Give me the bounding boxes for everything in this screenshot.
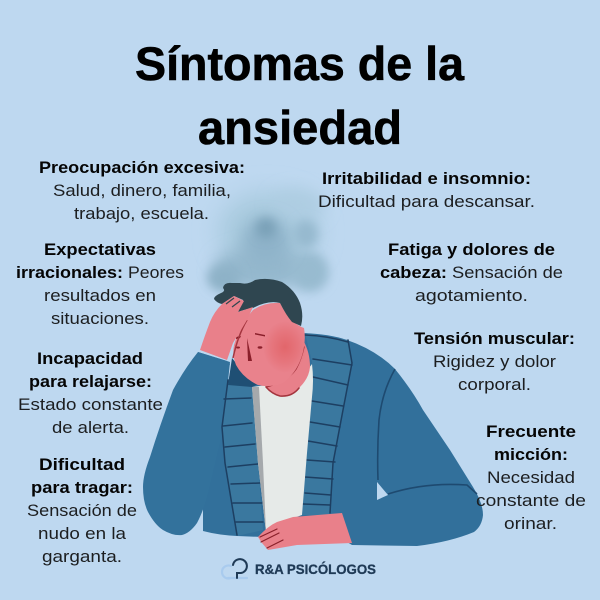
sleeve cuff over raised hand bbox=[198, 352, 230, 385]
symptom: dificultad para tragar: para tragar: bbox=[31, 478, 133, 497]
neck bbox=[265, 340, 310, 396]
symptom: incapacidad para relajarse bbox=[18, 349, 163, 437]
symptom: dificultad para tragar: Dificultad bbox=[39, 455, 125, 474]
symptom: tensión muscular: Tensión muscular: bbox=[414, 329, 575, 348]
symptom: tensión muscular: Rigidez y dolor bbox=[433, 352, 556, 371]
title: Síntomas de la bbox=[135, 37, 465, 90]
icon: logo mark bbox=[222, 559, 247, 578]
symptom: incapacidad para relajarse: para relajarse: bbox=[29, 372, 152, 391]
raised hand bbox=[200, 296, 253, 360]
symptom: expectativas irracionales: Expectativas bbox=[44, 240, 156, 259]
band outlines and ribs bbox=[222, 335, 352, 535]
symptom: incapacidad para relajarse: Incapacidad bbox=[37, 349, 143, 368]
symptom: fatiga y dolores de cabeza: Fatiga y dolores de bbox=[388, 240, 555, 259]
symptom: expectativas irracionales: resultados en bbox=[44, 286, 156, 305]
left cardigan band bbox=[222, 370, 263, 536]
symptom: fatiga y dolores de cabeza: agotamiento. bbox=[415, 286, 528, 305]
logo: R&A Psicólogos bbox=[222, 559, 376, 578]
symptom: frecuente micción: micción: bbox=[494, 445, 568, 464]
symptom: frecuente micción: Necesidad bbox=[487, 468, 575, 487]
shadow line between hand and face bbox=[233, 320, 247, 358]
symptom: incapacidad para relajarse: de alerta. bbox=[52, 418, 129, 437]
symptom: irritabilidad e insomnio: Dificultad para descansar. bbox=[318, 192, 535, 211]
symptom: frecuente micción: orinar. bbox=[504, 514, 557, 533]
jacket torso and right sleeve bbox=[203, 333, 483, 546]
face bbox=[233, 303, 305, 386]
symptom: incapacidad para relajarse: Estado constante bbox=[18, 395, 163, 414]
illustration: worried man bbox=[143, 279, 483, 550]
symptom: expectativas irracionales: situaciones. bbox=[51, 309, 149, 328]
symptom: dificultad para tragar: nudo en la bbox=[38, 524, 127, 543]
symptom: preocupación excesiva: Preocupación excesiva: bbox=[39, 158, 245, 177]
symptom: dificultad para tragar bbox=[27, 455, 137, 566]
dark folds on right sleeve bbox=[378, 369, 477, 494]
symptom: tensión muscular bbox=[414, 329, 575, 394]
jaw fold line bbox=[266, 347, 304, 396]
symptom: tensión muscular: corporal. bbox=[458, 375, 531, 394]
symptom: dificultad para tragar: garganta. bbox=[42, 547, 122, 566]
symptom: fatiga y dolores de cabeza bbox=[380, 240, 563, 305]
symptom: dificultad para tragar: Sensación de bbox=[27, 501, 137, 520]
symptom: fatiga y dolores de cabeza: cabeza: bbox=[380, 263, 447, 282]
smoke cloud above the head bbox=[207, 189, 329, 292]
symptom: irritabilidad e insomnio bbox=[318, 169, 535, 211]
t-shirt shadow bbox=[252, 387, 266, 532]
symptom: expectativas irracionales: irracionales: bbox=[16, 263, 123, 282]
logo wordmark: R&A PSICÓLOGOS bbox=[255, 560, 376, 577]
symptom: expectativas irracionales: Peores bbox=[128, 263, 184, 282]
symptom: preocupación excesiva: trabajo, escuela. bbox=[74, 204, 209, 223]
cheek blush bbox=[263, 321, 307, 373]
symptom: frecuente micción: constante de bbox=[476, 491, 586, 510]
symptom: expectativas irracionales bbox=[16, 240, 184, 328]
symptom: preocupación excesiva: Salud, dinero, familia, bbox=[53, 181, 231, 200]
symptom: fatiga y dolores de cabeza: Sensación de bbox=[452, 263, 563, 282]
resting hand bbox=[258, 513, 352, 550]
symptom: frecuente micción: Frecuente bbox=[486, 422, 576, 441]
armpit gap bbox=[377, 482, 388, 500]
left sleeve bbox=[143, 352, 230, 535]
symptom: irritabilidad e insomnio: Irritabilidad e insomnio: bbox=[322, 169, 531, 188]
symptom: frecuente micción bbox=[476, 422, 586, 533]
title bbox=[135, 37, 465, 154]
right cardigan band bbox=[302, 333, 352, 515]
dark collar shadow bbox=[228, 358, 262, 387]
hair bbox=[214, 279, 302, 326]
symptom: preocupación excesiva bbox=[39, 158, 245, 223]
title: ansiedad bbox=[198, 101, 402, 154]
t-shirt bbox=[252, 364, 313, 532]
facial features bbox=[236, 333, 265, 361]
